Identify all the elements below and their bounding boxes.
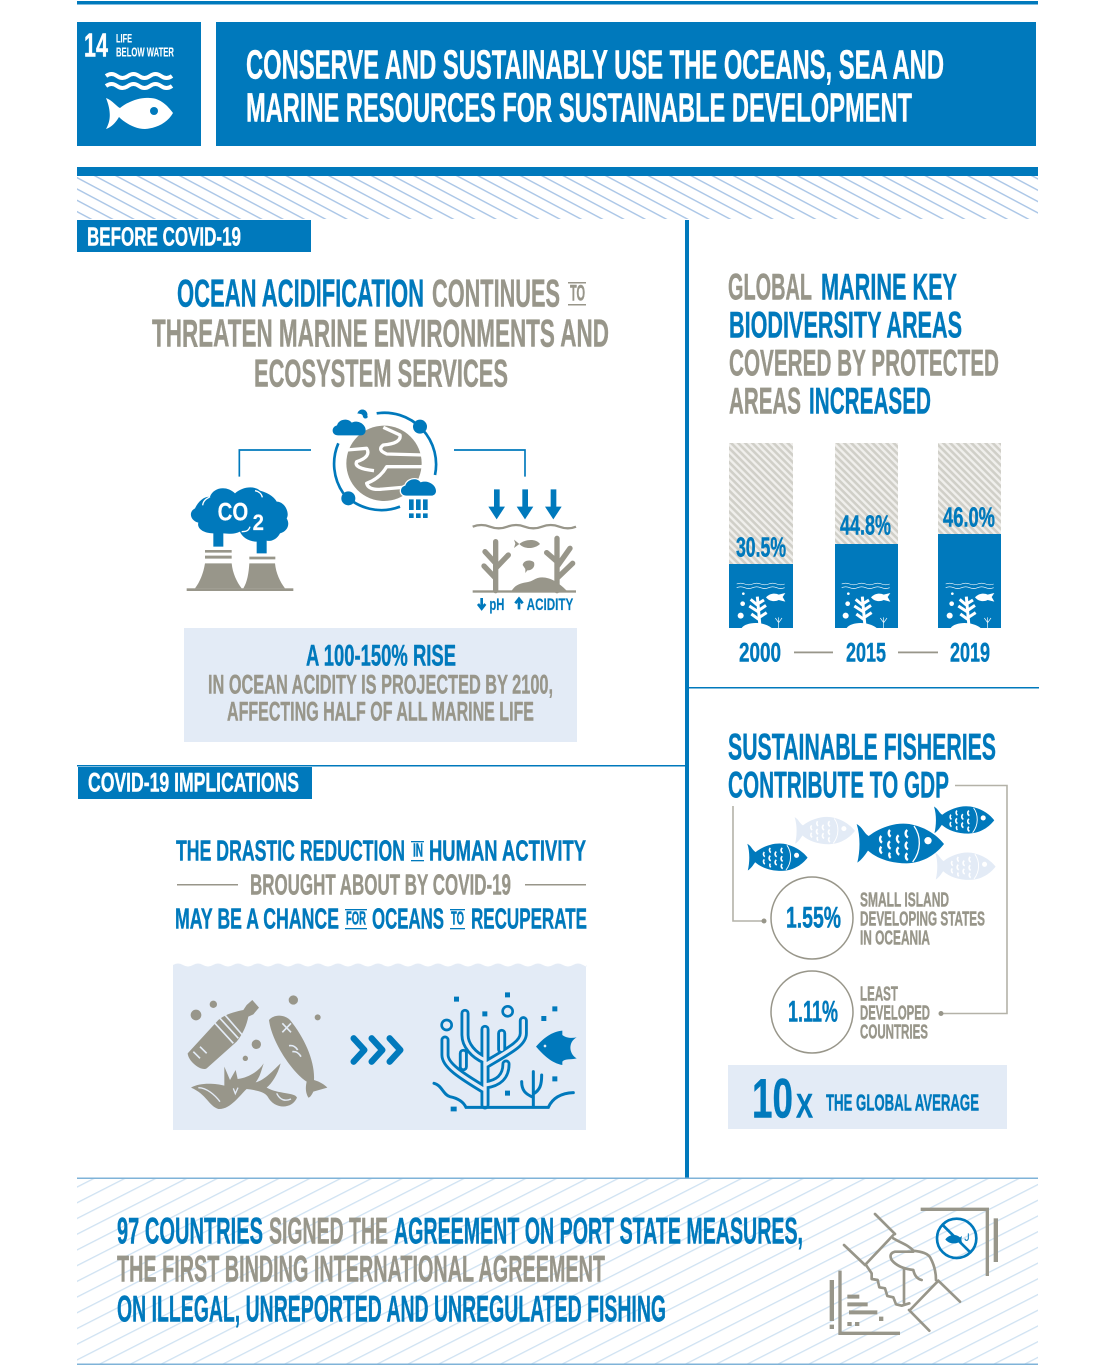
text block: reduction in human activity: IN	[413, 840, 423, 860]
SDG 14 icon tile: BELOW WATER	[116, 44, 174, 59]
text block: agreement: THE FIRST BINDING INTERNATIONAL AGREEMENT	[117, 1248, 605, 1289]
stat: 1.11% least developed countries: LEAST	[860, 983, 898, 1005]
icon: acidifying ocean: ACIDITY	[527, 596, 573, 614]
stat: 1.11% least developed countries: COUNTRIES	[860, 1021, 928, 1043]
icon: acidifying ocean	[473, 489, 576, 614]
stat: 1.11% least developed countries	[771, 971, 930, 1053]
callout: 10x the global average	[728, 1065, 1007, 1129]
heading: marine key biodiversity areas: BIODIVERSITY AREAS	[729, 304, 962, 345]
stat: 1.11% least developed countries: 1.11%	[788, 995, 838, 1028]
text block: reduction in human activity	[175, 835, 587, 935]
heading: ocean acidification	[152, 272, 609, 395]
footer panel: port state measures	[77, 1178, 1038, 1365]
callout: 100-150% rise: AFFECTING HALF OF ALL MARINE LIFE	[227, 696, 534, 726]
bar: 2019: 2019	[950, 637, 990, 667]
icon: handshake with no-fishing sign	[830, 1209, 998, 1333]
stat: 1.11% least developed countries: DEVELOPED	[860, 1002, 930, 1024]
panel: pollution to recovery	[173, 964, 587, 1130]
bar: 2015: 44.8%	[840, 509, 891, 540]
text block: reduction in human activity: MAY BE A CHANCE	[175, 903, 339, 935]
icon: globe with clouds	[333, 409, 436, 518]
header bar	[77, 167, 1038, 176]
icon: marine pollution	[188, 995, 327, 1109]
stat: 1.55% small island developing states: IN OCEANIA	[860, 927, 930, 949]
stat: 1.55% small island developing states: SMALL ISLAND	[860, 889, 949, 911]
callout: 10x the global average: X	[796, 1087, 813, 1125]
stat: 1.55% small island developing states: DEVELOPING STATES	[860, 908, 985, 930]
heading: marine key biodiversity areas: AREAS	[729, 380, 801, 421]
SDG 14 icon tile	[77, 22, 201, 146]
callout: 10x the global average: THE GLOBAL AVERAGE	[826, 1089, 979, 1115]
bar: 2019	[938, 443, 1001, 667]
top rule	[77, 1, 1038, 4]
text block: reduction in human activity: HUMAN ACTIVITY	[429, 835, 586, 867]
heading: ocean acidification: THREATEN MARINE ENVIRONMENTS AND	[152, 312, 609, 355]
label: before covid-19: BEFORE COVID-19	[87, 221, 241, 251]
heading: ocean acidification: TO	[570, 280, 585, 305]
heading: marine key biodiversity areas: INCREASED	[809, 380, 931, 421]
icon: power plant with CO2 clouds	[187, 487, 293, 591]
text block: reduction in human activity: OCEANS	[372, 903, 444, 935]
bar: 2019: 46.0%	[943, 501, 995, 532]
icon: power plant with CO2 clouds: CO	[218, 498, 248, 526]
bar: 2015: 2015	[846, 637, 886, 667]
acidification diagram	[187, 409, 576, 614]
bar: 2015	[835, 443, 898, 667]
text block: reduction in human activity: BROUGHT ABOUT BY COVID-19	[250, 869, 511, 901]
text block: agreement: SIGNED THE	[269, 1210, 388, 1251]
heading: sustainable fisheries	[728, 726, 996, 805]
bar: 2000: 30.5%	[736, 531, 786, 562]
icon: shoal of fish	[747, 806, 996, 880]
heading: ocean acidification: ECOSYSTEM SERVICES	[254, 352, 508, 395]
icon: healthy coral and fish	[434, 992, 577, 1111]
callout: 100-150% rise: A 100-150% RISE	[306, 639, 456, 672]
icon: acidifying ocean: pH	[489, 596, 504, 614]
SDG 14 icon tile: 14	[84, 26, 108, 63]
stat: 1.55% small island developing states	[771, 877, 985, 959]
callout: 100-150% rise: IN OCEAN ACIDITY IS PROJECTED BY 2100,	[208, 669, 553, 699]
heading: sustainable fisheries: CONTRIBUTE TO GDP	[728, 764, 949, 805]
label: covid-19 implications: COVID-19 IMPLICATIONS	[88, 767, 299, 797]
text block: reduction in human activity: TO	[451, 908, 464, 928]
label: covid-19 implications	[78, 767, 312, 799]
callout: 100-150% rise	[184, 628, 577, 742]
heading: marine key biodiversity areas	[728, 266, 999, 421]
bar chart: protected areas	[729, 443, 1001, 667]
text block: reduction in human activity: FOR	[346, 908, 366, 928]
callout: 10x the global average: 10	[752, 1066, 793, 1129]
heading: ocean acidification: CONTINUES	[432, 272, 560, 315]
title banner	[216, 22, 1036, 146]
connector lines	[733, 786, 1007, 1014]
text block: reduction in human activity: RECUPERATE	[471, 903, 587, 935]
SDG 14 icon tile: LIFE	[116, 31, 132, 45]
stat: 1.55% small island developing states: 1.55%	[786, 901, 841, 934]
icon: power plant with CO2 clouds: 2	[253, 510, 264, 535]
heading: marine key biodiversity areas: GLOBAL	[728, 266, 812, 307]
text block: reduction in human activity: THE DRASTIC REDUCTION	[176, 835, 405, 867]
heading: marine key biodiversity areas: MARINE KEY	[821, 266, 957, 307]
bar: 2000	[729, 443, 793, 667]
text block: agreement	[117, 1210, 803, 1329]
icon: chevrons	[354, 1038, 400, 1062]
text block: agreement: 97 COUNTRIES	[117, 1210, 263, 1251]
heading: ocean acidification: OCEAN ACIDIFICATION	[177, 272, 424, 315]
bar: 2000: 2000	[739, 637, 781, 667]
